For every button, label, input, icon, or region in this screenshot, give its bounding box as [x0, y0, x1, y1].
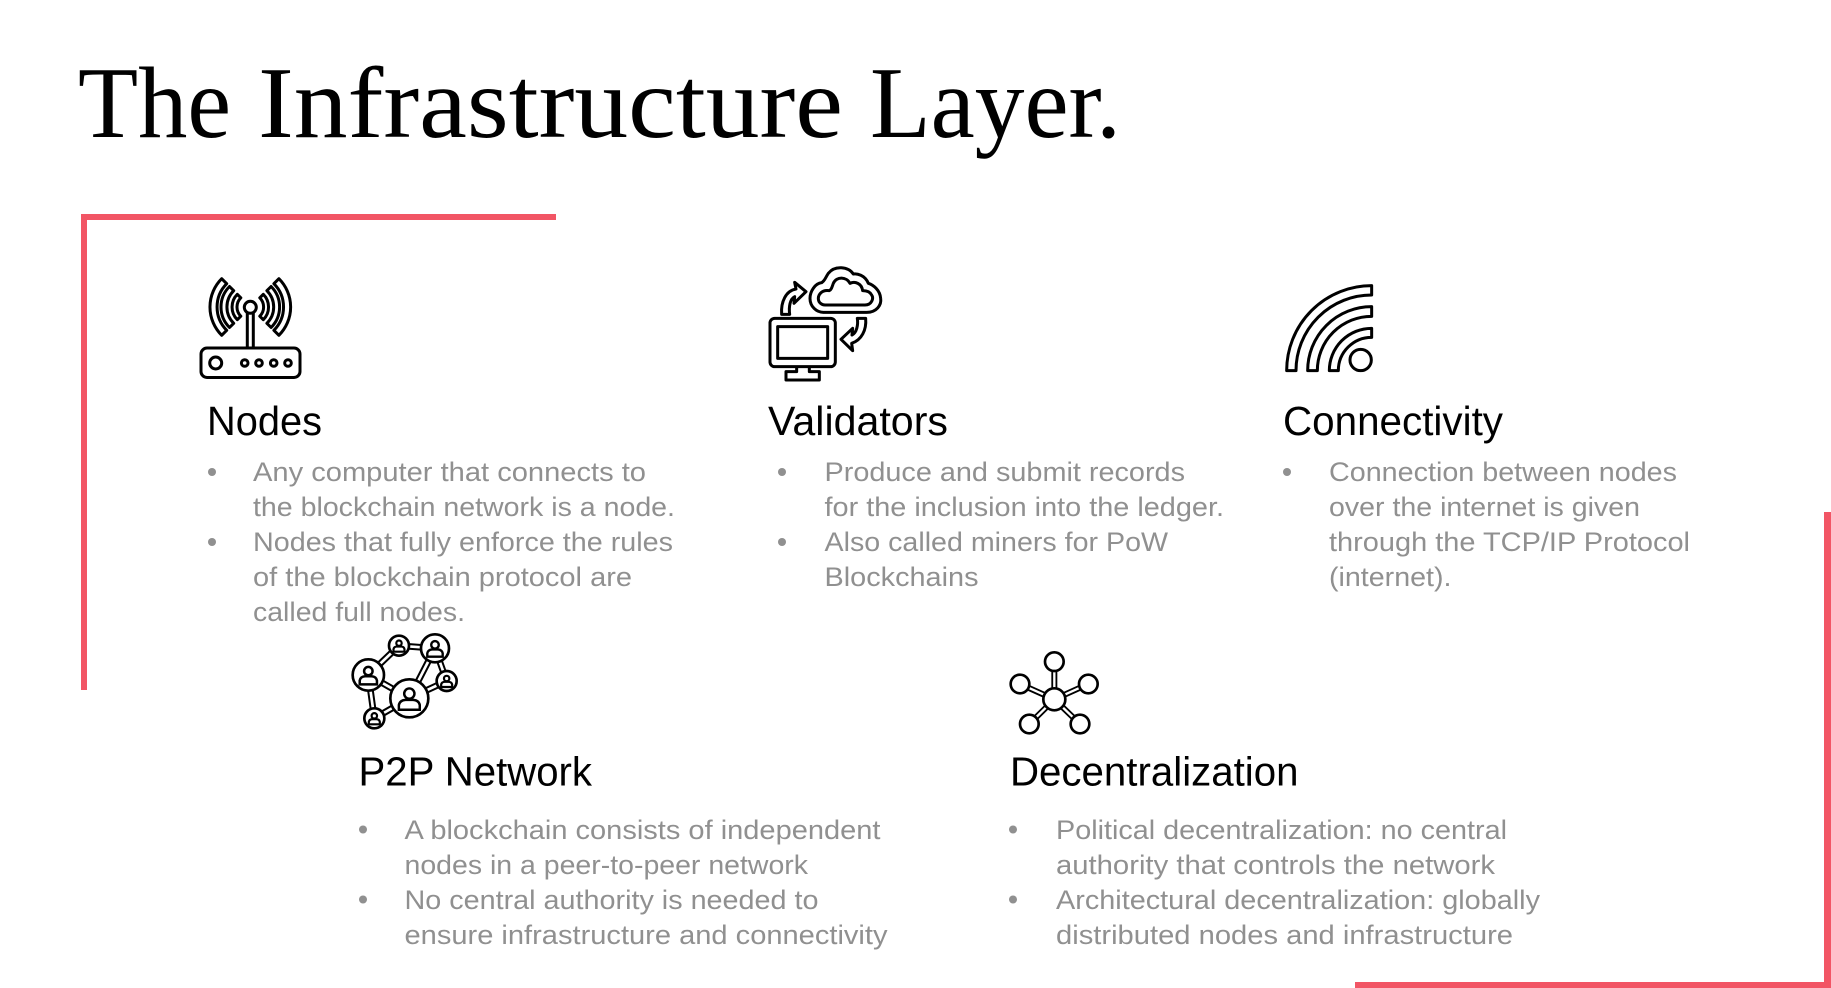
text block: p2p bullets [359, 815, 888, 950]
panel: p2p network [353, 634, 888, 950]
title: Layer. [870, 47, 1121, 160]
text block: decentralization bullets [1009, 815, 1541, 950]
panel: validators [768, 268, 1224, 592]
panel: connectivity [1283, 286, 1690, 592]
icon: wifi signal [1287, 286, 1372, 371]
text block: validators bullets: Produce and submit records [824, 457, 1185, 487]
text block: decentralization bullets: Political decentralization: no central [1056, 815, 1507, 845]
text block: nodes bullets: Nodes that fully enforce the rules [253, 527, 673, 557]
icon: hub and spokes [1011, 652, 1098, 733]
text block: p2p bullets: A blockchain consists of independent [404, 815, 881, 845]
icon: wireless router [201, 279, 300, 378]
text block: connectivity bullets: (internet). [1329, 562, 1452, 592]
text block: connectivity bullets: through the TCP/IP Protocol [1329, 527, 1690, 557]
text block: validators bullets: Also called miners for PoW [824, 527, 1168, 557]
text block: p2p bullets: nodes in a peer-to-peer network [404, 850, 809, 880]
icon: people network [353, 634, 457, 728]
title [78, 47, 1121, 160]
text block: validators bullets [778, 457, 1224, 592]
text block: decentralization bullets: distributed nodes and infrastructure [1056, 920, 1513, 950]
panel: decentralization [1009, 652, 1541, 950]
frame: bottom-right red corner bracket [1355, 512, 1831, 988]
text block: p2p bullets: No central authority is needed to [404, 885, 818, 915]
text block: connectivity bullets: over the internet is given [1329, 492, 1640, 522]
panel: nodes [201, 279, 675, 627]
heading: p2p network: P2P Network [358, 748, 592, 794]
heading: connectivity: Connectivity [1283, 398, 1503, 444]
icon: computer and cloud sync [770, 268, 881, 380]
frame: top-left red corner bracket [81, 214, 556, 690]
text block: nodes bullets: called full nodes. [253, 597, 465, 627]
text block: validators bullets: Blockchains [824, 562, 978, 592]
text block: connectivity bullets: Connection between nodes [1329, 457, 1677, 487]
text block: connectivity bullets [1283, 457, 1690, 592]
text block: nodes bullets [208, 457, 675, 627]
text block: decentralization bullets: Architectural decentralization: globally [1056, 885, 1541, 915]
text block: nodes bullets: the blockchain network is a node. [253, 492, 675, 522]
heading: validators: Validators [768, 398, 948, 444]
title: The [78, 47, 231, 160]
text block: p2p bullets: ensure infrastructure and connectivity [404, 920, 888, 950]
title: Infrastructure [258, 47, 843, 160]
text block: decentralization bullets: authority that controls the network [1056, 850, 1496, 880]
text block: nodes bullets: of the blockchain protocol are [253, 562, 632, 592]
text block: validators bullets: for the inclusion into the ledger. [824, 492, 1224, 522]
heading: nodes: Nodes [207, 398, 322, 444]
heading: decentralization: Decentralization [1010, 748, 1298, 794]
text block: nodes bullets: Any computer that connects to [253, 457, 646, 487]
